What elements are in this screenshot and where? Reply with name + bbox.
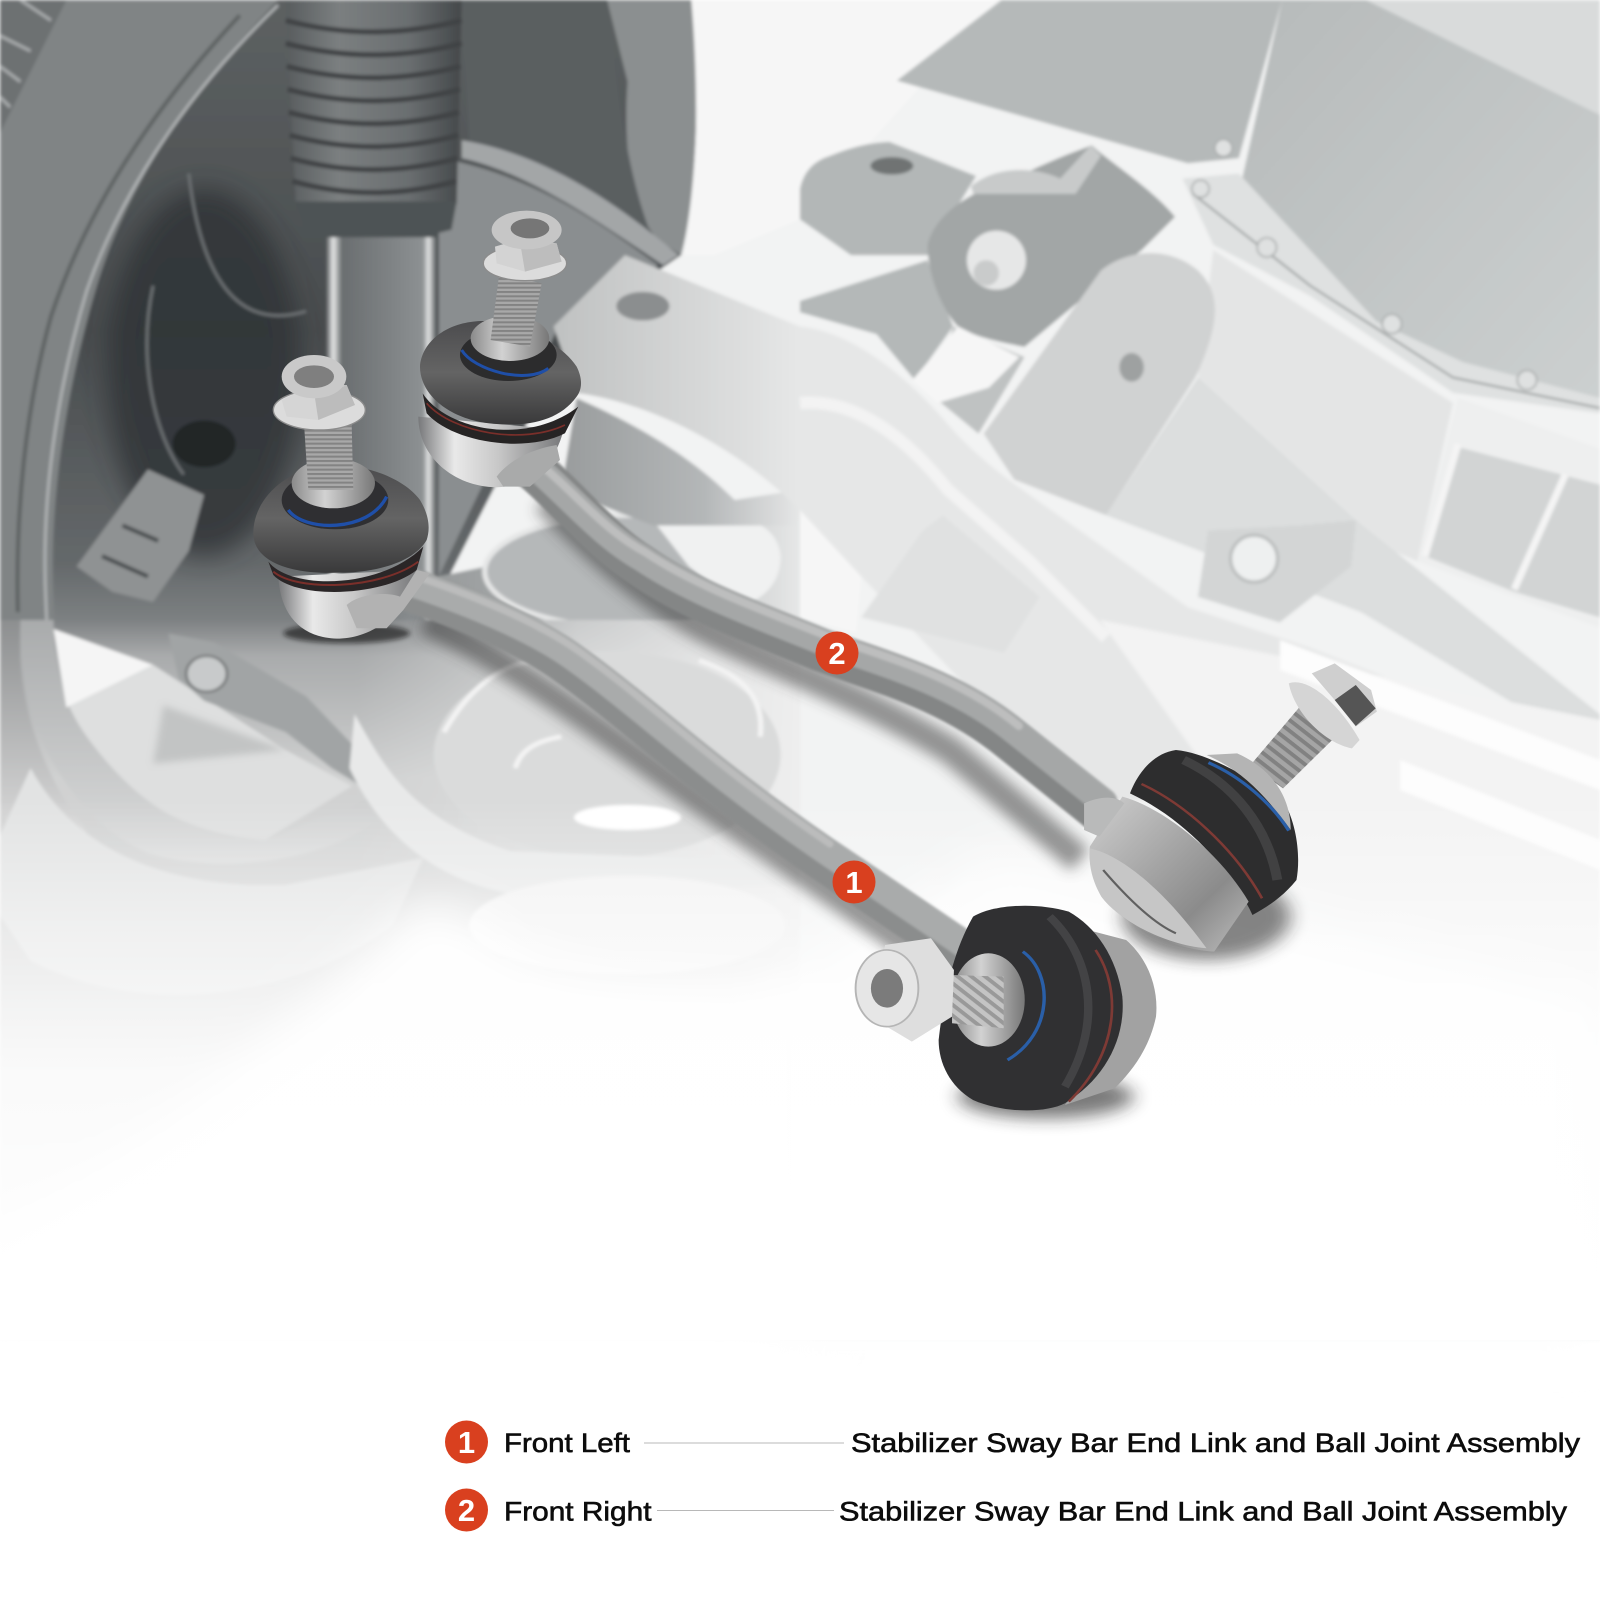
badge 2 on link — [816, 632, 858, 674]
boot dark ring — [460, 329, 557, 381]
bottom joint of link 1 — [856, 906, 1156, 1118]
badge 2 — [445, 1488, 488, 1532]
top dark panel — [897, 0, 1282, 163]
dark lump — [172, 420, 236, 467]
rim shadow — [153, 705, 286, 764]
thread — [304, 423, 353, 490]
light behind upper link — [561, 398, 800, 526]
flange rim — [1183, 173, 1600, 413]
white top right — [684, 0, 800, 255]
badge 1 — [445, 1420, 488, 1464]
knuckle arcs — [147, 173, 306, 474]
bracket — [77, 469, 204, 602]
weld to tube — [497, 445, 560, 487]
thread — [491, 273, 542, 347]
bolt flange — [1289, 682, 1360, 748]
fender highlight line — [45, 5, 278, 663]
tube bracket — [800, 142, 976, 255]
upright tube — [984, 253, 1215, 515]
washer — [292, 458, 375, 508]
tube 1 — [408, 576, 985, 965]
coil swirl highlights — [485, 515, 770, 628]
dark arm — [168, 633, 380, 797]
scene: right chassis panels — [800, 0, 1600, 800]
joint shadow — [283, 623, 410, 643]
area behind shaft right — [439, 158, 658, 577]
bottom white — [0, 898, 816, 1360]
clamp bolt — [967, 231, 1026, 290]
arm bolt — [186, 656, 227, 692]
cup — [418, 417, 563, 487]
nut — [282, 385, 355, 420]
badge 2 on link: 2 — [828, 636, 846, 671]
rim light — [66, 665, 352, 840]
seal ring — [423, 393, 578, 444]
box right — [1417, 398, 1600, 628]
weld to tube — [347, 570, 430, 628]
washer — [471, 316, 549, 361]
badge 1 on link: 1 — [845, 865, 863, 900]
rubber boot — [420, 321, 581, 425]
tire tread corner — [0, 0, 66, 133]
description 1: Stabilizer Sway Bar End Link and Ball Joint Assembly — [851, 1428, 1581, 1458]
cup — [1090, 797, 1249, 952]
label: front left: Front Left — [504, 1428, 631, 1458]
cup end face — [1089, 847, 1207, 948]
weld — [1084, 798, 1124, 837]
blue ring — [1008, 952, 1044, 1060]
gray arm — [800, 260, 953, 380]
area above strap — [462, 0, 653, 240]
scene: lower left wheel, rim and arm — [0, 620, 816, 1360]
joint shadow — [1122, 873, 1291, 960]
tire lip band — [20, 620, 380, 864]
white corner — [800, 0, 999, 219]
white gap — [912, 327, 1019, 403]
blue ring — [288, 497, 387, 525]
strut cap — [295, 202, 457, 240]
bottom joint of link 2 — [1084, 663, 1377, 960]
boot dark ring — [282, 471, 388, 529]
cup — [278, 570, 417, 639]
nut — [870, 938, 954, 1042]
badge 1 on link — [832, 860, 876, 904]
pan panel — [1239, 0, 1600, 403]
tube 2 — [530, 460, 1104, 810]
bolt nut — [1312, 663, 1377, 727]
top joint of link 2 — [418, 211, 581, 487]
lower mount — [861, 515, 1040, 653]
badge 2: 2 — [458, 1493, 475, 1528]
link 1: front left end link — [253, 355, 1156, 1118]
nut — [495, 238, 562, 272]
top joint of link 1 — [253, 355, 430, 643]
right side lightening — [357, 620, 800, 1338]
outer band left — [0, 620, 87, 841]
thread — [952, 975, 1004, 1028]
strap below arch — [462, 140, 679, 265]
legend — [445, 1420, 1581, 1532]
rubber boot — [939, 906, 1123, 1110]
connector line 2 — [657, 1510, 834, 1511]
flange bolts — [1192, 139, 1537, 390]
disc arcs — [444, 660, 761, 768]
tire and fender band — [0, 0, 278, 663]
strut chrome shaft — [327, 237, 436, 625]
white coil gap — [653, 515, 781, 607]
joint shadow — [958, 1075, 1134, 1118]
washer — [952, 953, 1025, 1047]
control arm hole — [616, 292, 669, 320]
lower left white — [800, 510, 861, 633]
description 2: Stabilizer Sway Bar End Link and Ball Joint Assembly — [839, 1496, 1568, 1526]
nut collar — [856, 950, 918, 1027]
nut collar — [282, 355, 346, 398]
link 2: front right end link — [418, 211, 1377, 960]
lower base — [0, 620, 800, 1338]
white fade overlay — [0, 800, 1600, 1340]
tube shadow — [545, 500, 1080, 860]
fender inner line — [17, 15, 240, 612]
tube shadow — [425, 622, 935, 965]
dark triangle wall — [1106, 378, 1600, 755]
disc area — [434, 651, 781, 858]
clamp — [928, 145, 1175, 347]
legend row 2 — [445, 1488, 1568, 1532]
flange — [483, 246, 567, 281]
pan top wedge — [1366, 0, 1600, 115]
lower disc — [469, 876, 786, 974]
cup — [1065, 930, 1156, 1105]
red ring — [1069, 950, 1112, 1102]
outer arch band right — [607, 0, 697, 255]
blue ring — [1208, 763, 1289, 831]
knuckle dark center — [107, 189, 301, 556]
rubber boot — [253, 465, 429, 573]
scene: lower right streaks — [760, 620, 1600, 1340]
outer soft tire — [0, 768, 423, 995]
blue ring — [462, 350, 548, 375]
seal ring — [268, 547, 423, 592]
red ring — [1141, 784, 1262, 898]
nut collar — [492, 211, 562, 249]
white wheel gap — [54, 629, 153, 707]
strut bellows — [286, 0, 462, 204]
flange — [273, 390, 365, 430]
control arm upper — [554, 255, 800, 510]
wheel arch dark mass — [0, 0, 697, 663]
connector line 1 — [644, 1442, 844, 1444]
white disc hole — [574, 805, 681, 830]
badge 1: 1 — [458, 1425, 475, 1460]
label: front right: Front Right — [504, 1496, 652, 1526]
bolt thread — [1251, 702, 1342, 788]
scene: left wheel well and strut — [0, 0, 800, 663]
panel side wall — [1198, 250, 1453, 561]
bolt plate — [1198, 520, 1356, 622]
control arm continuation — [800, 327, 1600, 800]
lower center gray — [439, 500, 800, 663]
light arm curve — [349, 714, 800, 894]
legend row 1 — [445, 1420, 1581, 1464]
washer — [1207, 753, 1291, 830]
rubber boot — [1130, 750, 1298, 915]
